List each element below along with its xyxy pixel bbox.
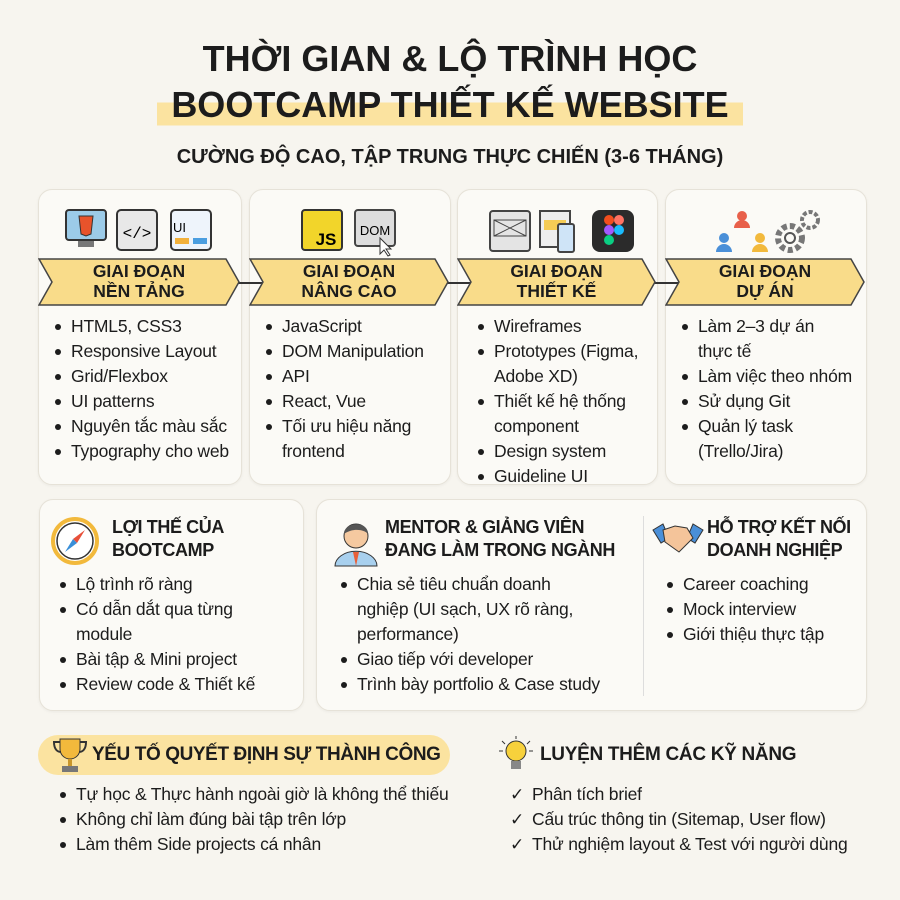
panel: phase 1: Responsive Layout	[71, 341, 216, 361]
icon: trophy	[53, 738, 87, 772]
panel: mentor and partner: Career coaching	[683, 574, 808, 594]
icons: html css ui: UI	[173, 220, 186, 235]
icons: wireframe figma	[489, 210, 634, 253]
banner: phase 4: DỰ ÁN	[736, 281, 794, 301]
panel: phase 1: Grid/Flexbox	[71, 366, 168, 386]
banner: phase 2: NÂNG CAO	[301, 281, 397, 301]
panel: bootcamp advantages: LỢI THẾ CỦA	[112, 517, 224, 537]
panel: phase 3: Prototypes (Figma, Adobe XD)	[494, 341, 638, 386]
section: extra skills: Thử nghiệm layout & Test với người dùng	[532, 834, 848, 854]
icon: handshake	[652, 523, 704, 553]
panel: phase 2: DOM Manipulation	[282, 341, 424, 361]
panel: phase 2: JavaScript	[282, 316, 362, 336]
panel: phase 3: Guideline UI	[494, 466, 588, 486]
panel: bootcamp advantages: Review code & Thiết kế	[76, 674, 255, 694]
banner: phase 3: GIAI ĐOẠN	[510, 261, 603, 281]
panel: phase 1: UI patterns	[71, 391, 154, 411]
section: extra skills: LUYỆN THÊM CÁC KỸ NĂNG	[540, 744, 796, 765]
panel: bootcamp advantages: Bài tập & Mini project	[76, 649, 237, 669]
banner: phase 1: NỀN TẢNG	[93, 281, 185, 301]
panel: mentor and partner	[316, 499, 867, 711]
icons: js dom: DOM	[360, 223, 390, 238]
banner: phase 2	[249, 258, 449, 306]
banner: phase 4: GIAI ĐOẠN	[719, 261, 811, 281]
section: extra skills	[499, 736, 848, 854]
panel: bootcamp advantages: Có dẫn dắt qua từng module	[76, 599, 233, 644]
section: success factor: Tự học & Thực hành ngoài giờ là không thể thiếu	[76, 784, 449, 804]
section: success factor: Không chỉ làm đúng bài tập trên lớp	[76, 809, 346, 829]
icon: compass	[51, 517, 99, 565]
panel: bootcamp advantages: Lộ trình rõ ràng	[76, 574, 192, 594]
banner: phase 1	[38, 258, 240, 306]
icon: bulb	[499, 736, 533, 769]
panel: phase 1: HTML5, CSS3	[71, 316, 182, 336]
icons: js dom	[301, 209, 396, 257]
panel: mentor and partner: HỖ TRỢ KẾT NỐI	[707, 517, 851, 537]
panel: mentor and partner: Trình bày portfolio & Case study	[357, 674, 600, 694]
panel: phase 3: Design system	[494, 441, 606, 461]
icons: team gears	[716, 210, 820, 253]
banner: phase 2: GIAI ĐOẠN	[303, 261, 395, 281]
panel: phase 3: Thiết kế hệ thống component	[494, 391, 626, 436]
panel: mentor and partner: DOANH NGHIỆP	[707, 540, 842, 560]
panel: bootcamp advantages	[39, 499, 304, 711]
title: BOOTCAMP THIẾT KẾ WEBSITE	[171, 84, 729, 125]
banner: phase 3: THIẾT KẾ	[517, 281, 596, 301]
panel: phase 4	[665, 189, 867, 485]
arrow connectors	[220, 282, 680, 284]
title: THỜI GIAN & LỘ TRÌNH HỌC	[203, 38, 697, 79]
panel: phase 2	[249, 189, 451, 485]
section: extra skills: Phân tích brief	[532, 784, 642, 804]
icon: mentor	[334, 524, 378, 566]
panel: mentor and partner: MENTOR & GIẢNG VIÊN	[385, 517, 584, 537]
title	[157, 38, 743, 126]
panel: mentor and partner: ĐANG LÀM TRONG NGÀNH	[385, 540, 615, 560]
banner: phase 3	[457, 258, 656, 306]
subtitle: CƯỜNG ĐỘ CAO, TẬP TRUNG THỰC CHIẾN (3-6 THÁNG)	[177, 146, 723, 168]
panel: phase 1: Nguyên tắc màu sắc	[71, 416, 227, 436]
panel: phase 4: Quản lý task (Trello/Jira)	[698, 416, 793, 461]
panel: phase 1	[38, 189, 242, 485]
panel: phase 4: Làm việc theo nhóm	[698, 366, 852, 386]
panel: mentor and partner: Chia sẻ tiêu chuẩn doanh nghiệp (UI sạch, UX rõ ràng, performance)	[357, 574, 573, 644]
panel: phase 2: React, Vue	[282, 391, 366, 411]
panel: phase 1: Typography cho web	[71, 441, 229, 461]
section: success factor	[38, 735, 450, 854]
panel: phase 3: Wireframes	[494, 316, 581, 336]
panel: mentor and partner: Giới thiệu thực tập	[683, 624, 824, 644]
banner: phase 1: GIAI ĐOẠN	[93, 261, 185, 281]
section: extra skills: Cấu trúc thông tin (Sitemap, User flow)	[532, 809, 826, 829]
heading highlight	[38, 735, 450, 775]
panel: phase 2: API	[282, 366, 310, 386]
panel: phase 4: Làm 2–3 dự án thực tế	[698, 316, 814, 361]
panel: mentor and partner: Giao tiếp với developer	[357, 649, 533, 669]
panel: mentor and partner: Mock interview	[683, 599, 796, 619]
section: success factor: YẾU TỐ QUYẾT ĐỊNH SỰ THÀNH CÔNG	[92, 744, 441, 765]
banner: phase 4	[665, 258, 865, 306]
icons: html css ui	[65, 209, 212, 251]
panel: phase 4: Sử dụng Git	[698, 391, 790, 411]
panel: phase 3	[457, 189, 658, 485]
icons: html css ui: </>	[123, 225, 151, 243]
panel: phase 2: Tối ưu hiệu năng frontend	[282, 416, 411, 461]
icons: js dom: JS	[316, 230, 336, 249]
section: success factor: Làm thêm Side projects cá nhân	[76, 834, 321, 854]
panel: bootcamp advantages: BOOTCAMP	[112, 540, 214, 560]
